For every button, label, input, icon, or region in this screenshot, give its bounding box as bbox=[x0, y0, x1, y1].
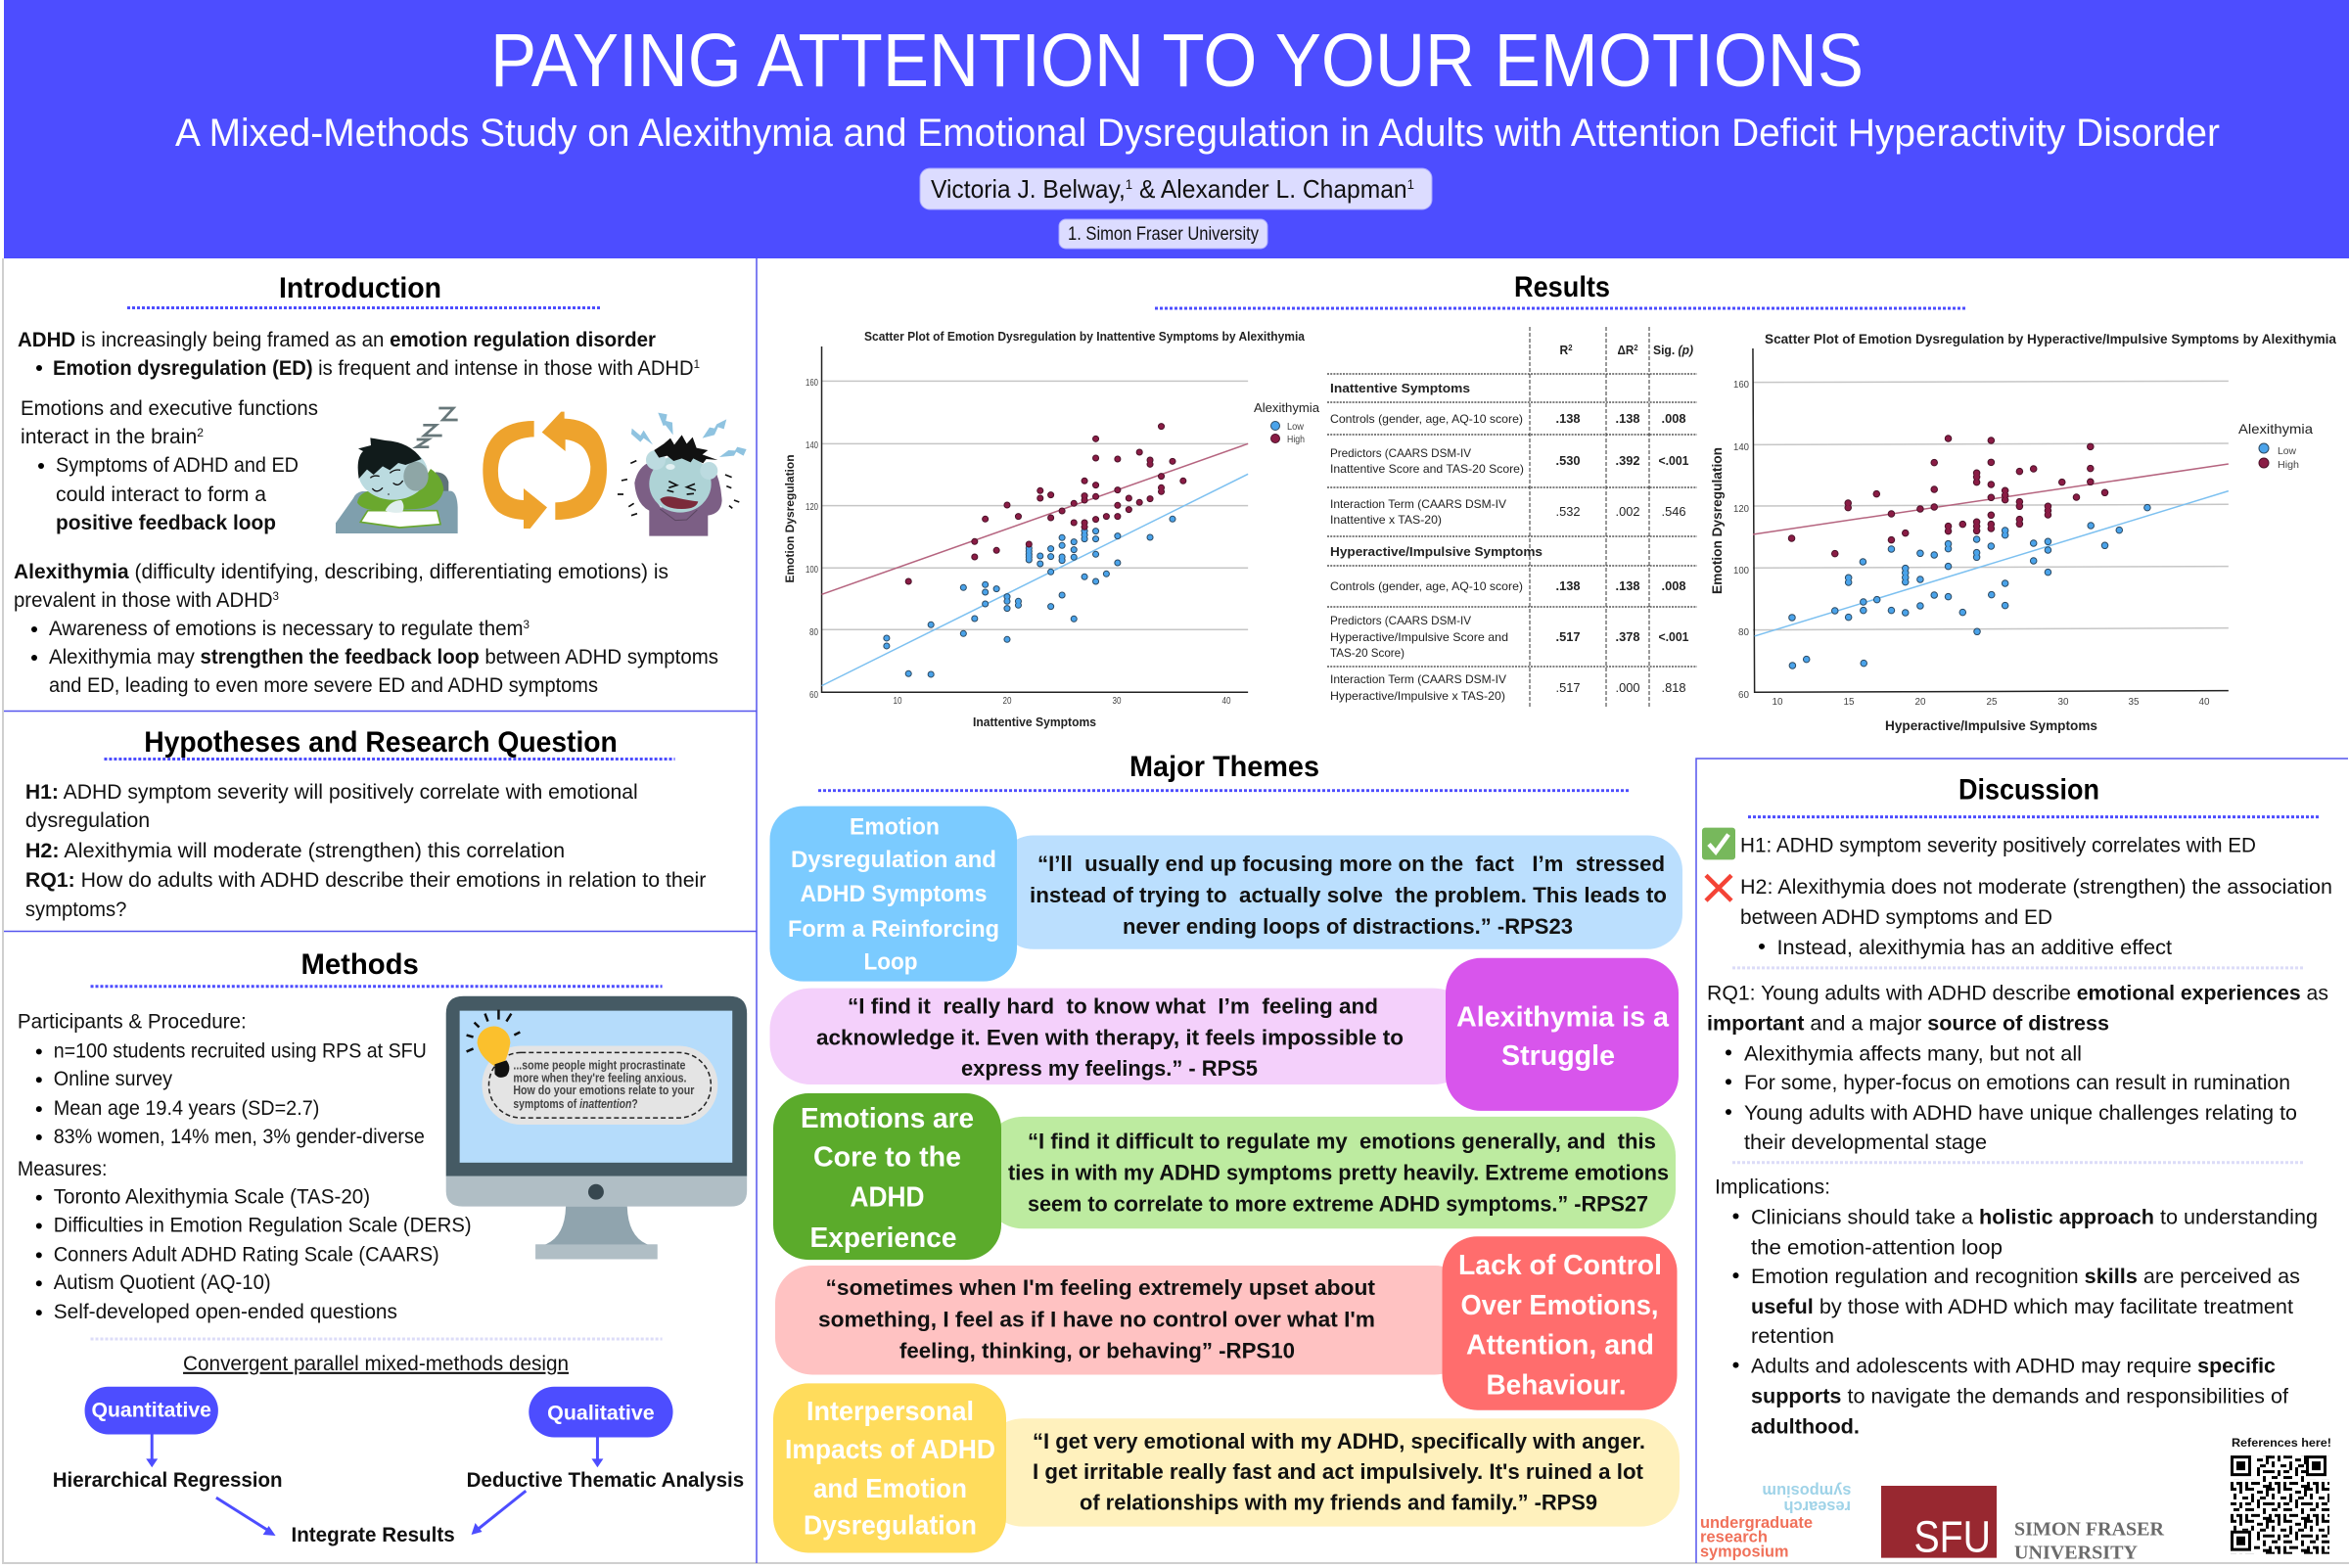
text block: participants and procedure: Mean age 19.4 years (SD=2.7) bbox=[54, 1097, 319, 1120]
regression table: Hyperactive/Impulsive Score and bbox=[1330, 630, 1508, 644]
text block: feedback loop: positive feedback loop bbox=[56, 512, 276, 534]
scatter plot: inattentive symptoms: 140 bbox=[806, 440, 818, 451]
authors pill: 1 bbox=[1407, 176, 1414, 192]
scatter plot: inattentive symptoms: 30 bbox=[1112, 696, 1122, 707]
text block: H2 result: H2: Alexithymia does not moderate (strengthen) the association bbox=[1740, 876, 2332, 899]
scatter plot: inattentive symptoms: 60 bbox=[809, 690, 818, 701]
panel: hypotheses and research question bbox=[25, 726, 706, 921]
theme 2: alexithymia is a struggle: Alexithymia is a bbox=[1456, 1001, 1670, 1033]
icon: computer monitor with survey question: more when they're feeling anxious. bbox=[513, 1071, 686, 1084]
text block: hypotheses: H2: Alexithymia will moderate (strengthen) this correlation bbox=[25, 840, 565, 862]
theme 3: emotions are core: Core to the bbox=[813, 1142, 961, 1174]
theme 4: lack of control: “sometimes when I'm feeling extremely upset about bbox=[826, 1275, 1376, 1300]
logo: undergraduate research symposium: research bbox=[1783, 1498, 1851, 1516]
text block: ADHD framing: 1 bbox=[694, 357, 700, 371]
regression table: ΔR bbox=[1617, 344, 1635, 357]
theme 3: emotions are core: Emotions are bbox=[801, 1103, 974, 1134]
theme 5: interpersonal impacts: Dysregulation bbox=[804, 1510, 977, 1541]
regression table: Predictors (CAARS DSM-IV bbox=[1330, 614, 1471, 627]
text block: alexithymia bbox=[14, 561, 718, 697]
QR code and references label bbox=[2231, 1436, 2331, 1554]
theme 5: interpersonal impacts: of relationships with my friends and family.” -RPS9 bbox=[1080, 1491, 1597, 1515]
icon: computer monitor with survey question: ...some people might procrastinate bbox=[513, 1058, 686, 1072]
logo: SFU: SIMON FRASER bbox=[2014, 1519, 2165, 1541]
regression table: .392 bbox=[1615, 454, 1640, 468]
text block: measures: Measures: bbox=[18, 1158, 107, 1180]
theme 5: interpersonal impacts: I get irritable really fast and act impulsively. It's ruined a lot bbox=[1033, 1459, 1644, 1484]
authors pill: Victoria J. Belway, bbox=[931, 174, 1136, 204]
text block: participants and procedure: n=100 students recruited using RPS at SFU bbox=[54, 1039, 427, 1062]
theme 1: reinforcing loop: Form a Reinforcing bbox=[788, 916, 999, 943]
theme 4: lack of control: Lack of Control bbox=[1458, 1250, 1662, 1281]
icon: computer monitor with survey question bbox=[446, 996, 747, 1259]
authors pill: & Alexander L. Chapman bbox=[1132, 174, 1407, 204]
pill: qualitative: Qualitative bbox=[547, 1403, 655, 1425]
scatter plot: inattentive symptoms: 160 bbox=[806, 378, 818, 389]
scatter plot: inattentive symptoms: Inattentive Symptoms bbox=[973, 715, 1096, 729]
text block: measures: Difficulties in Emotion Regulation Scale (DERS) bbox=[54, 1215, 472, 1237]
text block: measures: Autism Quotient (AQ-10) bbox=[54, 1271, 271, 1294]
arrow: qualitative to thematic analysis bbox=[591, 1437, 603, 1467]
text block: implications: Clinicians should take a holistic approach to understanding bbox=[1751, 1206, 2318, 1228]
text block: implications: Emotion regulation and recognition skills are perceived as bbox=[1751, 1266, 2300, 1288]
scatter plot: hyperactive/impulsive symptoms: 60 bbox=[1738, 690, 1749, 701]
text block: RQ1 result: important and a major source of distress bbox=[1707, 1013, 2109, 1035]
legend: alexithymia: Low bbox=[2278, 446, 2297, 457]
theme 1: reinforcing loop: instead of trying to actually solve the problem. This leads to bbox=[1030, 883, 1667, 907]
theme 3: emotions are core: ties in with my ADHD symptoms pretty heavily. Extreme emotions bbox=[1008, 1161, 1669, 1185]
text block: implications: the emotion-attention loop bbox=[1751, 1236, 2003, 1259]
regression table: Controls (gender, age, AQ-10 score) bbox=[1330, 412, 1523, 426]
pill: qualitative bbox=[529, 1387, 673, 1437]
text block: ADHD framing: ADHD is increasingly being framed as an emotion regulation disorder bbox=[18, 329, 656, 351]
logo: undergraduate research symposium: undergraduate bbox=[1700, 1513, 1813, 1532]
scatter plot: hyperactive/impulsive symptoms bbox=[1709, 332, 2336, 733]
text block: participants and procedure bbox=[18, 1011, 427, 1148]
text block: RQ1 result bbox=[1707, 983, 2328, 1154]
text block: measures: Self-developed open-ended questions bbox=[54, 1301, 397, 1323]
theme 1: reinforcing loop: Emotion bbox=[850, 814, 940, 840]
icon: cycle arrows bbox=[483, 412, 607, 529]
logo: undergraduate research symposium: symposium bbox=[1763, 1482, 1852, 1500]
text block: hypotheses bbox=[25, 781, 706, 921]
theme 4: lack of control: feeling, thinking, or behaving” -RPS10 bbox=[899, 1339, 1295, 1363]
text block: RQ1 result: Alexithymia affects many, but not all bbox=[1744, 1042, 2082, 1065]
arrow: thematic analysis to integration bbox=[472, 1491, 526, 1535]
theme 4: lack of control: Attention, and bbox=[1466, 1330, 1654, 1361]
regression table: TAS-20 Score) bbox=[1330, 646, 1405, 660]
regression table: 2 bbox=[1634, 344, 1638, 352]
scatter plot: hyperactive/impulsive symptoms: 10 bbox=[1772, 697, 1783, 708]
text block: alexithymia: prevalent in those with ADHD bbox=[14, 589, 281, 612]
theme 3: emotions are core: Experience bbox=[810, 1222, 956, 1254]
authors pill bbox=[920, 168, 1432, 209]
regression table: Hyperactive/Impulsive Symptoms bbox=[1330, 545, 1543, 559]
theme 4: lack of control: Over Emotions, bbox=[1460, 1290, 1658, 1321]
regression table: <.001 bbox=[1658, 454, 1689, 468]
panel: discussion bbox=[1700, 774, 2332, 1564]
panel: methods bbox=[18, 948, 747, 1546]
legend: alexithymia bbox=[1254, 401, 1319, 445]
panel: major themes bbox=[769, 751, 1682, 1552]
scatter plot: hyperactive/impulsive symptoms: 30 bbox=[2057, 697, 2069, 708]
scatter plot: inattentive symptoms bbox=[783, 330, 1319, 729]
text block: RQ1 result: For some, hyper-focus on emotions can result in rumination bbox=[1744, 1072, 2290, 1094]
regression table: .000 bbox=[1615, 681, 1640, 695]
panel: introduction bbox=[14, 272, 747, 697]
legend: alexithymia bbox=[2238, 421, 2313, 471]
regression table: .138 bbox=[1556, 412, 1581, 426]
text block: implications: Implications: bbox=[1715, 1176, 1830, 1199]
theme 3: emotions are core: seem to correlate to more extreme ADHD symptoms.” -RPS27 bbox=[1028, 1191, 1648, 1216]
text block: H2 result bbox=[1740, 876, 2332, 959]
theme 4: lack of control: something, I feel as if I have no control over what I'm bbox=[818, 1308, 1375, 1332]
title: PAYING ATTENTION TO YOUR EMOTIONS bbox=[490, 19, 1864, 103]
text block: hypotheses: RQ1: How do adults with ADHD describe their emotions in relation to their bbox=[25, 869, 706, 892]
text block: implications: adulthood. bbox=[1751, 1415, 1860, 1438]
regression table: Inattentive x TAS-20) bbox=[1330, 513, 1442, 527]
text block: hypotheses: symptoms? bbox=[25, 899, 126, 921]
regression table: .378 bbox=[1615, 630, 1640, 644]
theme 2: alexithymia is a struggle: “I find it really hard to know what I’m feeling and bbox=[848, 994, 1378, 1018]
regression table: .008 bbox=[1662, 412, 1686, 426]
icon: stressed person bbox=[618, 413, 747, 536]
logo: SFU: UNIVERSITY bbox=[2014, 1543, 2139, 1564]
text block: feedback loop bbox=[21, 397, 318, 534]
icon: computer monitor with survey question: How do your emotions relate to your bbox=[513, 1084, 695, 1097]
arrow: quantitative to regression bbox=[146, 1434, 158, 1467]
logo: undergraduate research symposium bbox=[1700, 1482, 1852, 1561]
text block: feedback loop: interact in the brain bbox=[21, 426, 196, 448]
scatter plot: hyperactive/impulsive symptoms: 100 bbox=[1733, 566, 1749, 576]
theme 1: reinforcing loop: “I’ll usually end up focusing more on the fact I’m stressed bbox=[1037, 852, 1665, 876]
legend: alexithymia: Alexithymia bbox=[1254, 401, 1319, 415]
text block: implications: retention bbox=[1751, 1325, 1834, 1348]
regression table: .530 bbox=[1556, 454, 1581, 468]
text block: implications bbox=[1715, 1176, 2318, 1438]
flow diagram: mixed-methods design: Convergent parallel mixed-methods design bbox=[183, 1353, 569, 1375]
text block: feedback loop: Emotions and executive functions bbox=[21, 397, 318, 420]
theme 2: alexithymia is a struggle: Struggle bbox=[1501, 1040, 1615, 1072]
QR code and references label: References here! bbox=[2232, 1436, 2331, 1450]
flow diagram: mixed-methods design: Deductive Thematic Analysis bbox=[467, 1469, 744, 1492]
heading: major themes: Major Themes bbox=[1129, 751, 1319, 783]
icon: computer monitor with survey question: symptoms of inattention? bbox=[513, 1097, 638, 1111]
scatter plot: inattentive symptoms: 80 bbox=[809, 627, 818, 638]
legend: alexithymia: Alexithymia bbox=[2238, 421, 2313, 437]
regression table: .818 bbox=[1662, 681, 1686, 695]
theme 5: interpersonal impacts: Impacts of ADHD bbox=[785, 1434, 995, 1464]
text block: alexithymia: and ED, leading to even more severe ED and ADHD symptoms bbox=[49, 674, 598, 697]
text block: participants and procedure: Online survey bbox=[54, 1068, 173, 1090]
heading: methods: Methods bbox=[300, 948, 419, 981]
regression table: .138 bbox=[1615, 412, 1640, 426]
scatter plot: inattentive symptoms: 10 bbox=[893, 696, 902, 707]
text block: measures: Conners Adult ADHD Rating Scale (CAARS) bbox=[54, 1243, 439, 1266]
theme 5: interpersonal impacts bbox=[773, 1383, 1680, 1552]
text block: measures bbox=[18, 1158, 472, 1323]
text block: participants and procedure: 83% women, 14% men, 3% gender-diverse bbox=[54, 1126, 425, 1148]
regression table: <.001 bbox=[1658, 630, 1689, 644]
regression table: .546 bbox=[1662, 505, 1686, 519]
text block: RQ1 result: their developmental stage bbox=[1744, 1131, 1987, 1154]
theme 5: interpersonal impacts: and Emotion bbox=[813, 1473, 967, 1503]
regression table: Inattentive Score and TAS-20 Score) bbox=[1330, 462, 1524, 476]
logo: SFU: SFU bbox=[1914, 1511, 1991, 1562]
theme 2: alexithymia is a struggle: acknowledge it. Even with therapy, it feels impossible to bbox=[816, 1025, 1404, 1049]
subtitle: A Mixed-Methods Study on Alexithymia and Emotional Dysregulation in Adults with Attention Deficit Hyperactivity Disorder bbox=[175, 112, 2220, 155]
theme 2: alexithymia is a struggle bbox=[769, 958, 1679, 1111]
theme 1: reinforcing loop: ADHD Symptoms bbox=[801, 881, 988, 907]
theme 5: interpersonal impacts: “I get very emotional with my ADHD, specifically with anger. bbox=[1033, 1429, 1645, 1453]
theme 2: alexithymia is a struggle: express my feelings.” - RPS5 bbox=[961, 1056, 1258, 1081]
regression table: .138 bbox=[1556, 579, 1581, 593]
regression table: R bbox=[1560, 344, 1569, 357]
scatter plot: hyperactive/impulsive symptoms: 80 bbox=[1738, 627, 1749, 638]
text block: measures: Toronto Alexithymia Scale (TAS-20) bbox=[54, 1186, 370, 1209]
regression table: Sig. (p) bbox=[1653, 344, 1693, 357]
theme 4: lack of control: Behaviour. bbox=[1486, 1369, 1626, 1401]
text block: alexithymia: 3 bbox=[523, 618, 530, 631]
pill: quantitative bbox=[85, 1387, 218, 1434]
scatter plot: inattentive symptoms: 100 bbox=[806, 565, 818, 576]
scatter plot: hyperactive/impulsive symptoms: 40 bbox=[2198, 697, 2210, 708]
text block: alexithymia: Alexithymia (difficulty identifying, describing, differentiating emotions) is bbox=[14, 561, 668, 583]
affiliation pill: 1. Simon Fraser University bbox=[1068, 224, 1259, 245]
heading: results: Results bbox=[1514, 271, 1610, 303]
scatter plot: hyperactive/impulsive symptoms: 35 bbox=[2128, 697, 2140, 708]
logo: SFU bbox=[1881, 1486, 2165, 1564]
text block: alexithymia: 3 bbox=[273, 589, 279, 603]
text block: feedback loop: Symptoms of ADHD and ED bbox=[56, 454, 299, 477]
icon: light bulb bbox=[467, 1010, 520, 1078]
scatter plot: hyperactive/impulsive symptoms: 20 bbox=[1914, 697, 1926, 708]
scatter plot: inattentive symptoms: Scatter Plot of Emotion Dysregulation by Inattentive Symptoms by Alexithymia bbox=[864, 330, 1306, 344]
theme 1: reinforcing loop: Dysregulation and bbox=[791, 847, 996, 873]
scatter plot: inattentive symptoms: Emotion Dysregulation bbox=[783, 454, 797, 583]
regression table: Controls (gender, age, AQ-10 score) bbox=[1330, 579, 1523, 593]
regression table: .517 bbox=[1556, 630, 1581, 644]
text block: ADHD framing: Emotion dysregulation (ED) is frequent and intense in those with ADHD bbox=[53, 357, 710, 380]
scatter plot: inattentive symptoms: 120 bbox=[806, 502, 818, 513]
theme 1: reinforcing loop bbox=[769, 807, 1682, 982]
pill: quantitative: Quantitative bbox=[92, 1400, 211, 1422]
regression table: .517 bbox=[1556, 681, 1581, 695]
icon: green check bbox=[1702, 828, 1735, 859]
regression table: Inattentive Symptoms bbox=[1330, 382, 1470, 395]
logo: undergraduate research symposium: symposium bbox=[1700, 1543, 1789, 1561]
scatter plot: hyperactive/impulsive symptoms: 15 bbox=[1844, 697, 1855, 708]
text block: hypotheses: dysregulation bbox=[25, 809, 150, 832]
heading: discussion: Discussion bbox=[1958, 774, 2099, 807]
legend: alexithymia: Low bbox=[1287, 422, 1305, 433]
scatter plot: hyperactive/impulsive symptoms: Emotion Dysregulation bbox=[1709, 447, 1725, 594]
regression table: Interaction Term (CAARS DSM-IV bbox=[1330, 672, 1506, 686]
panel: results bbox=[783, 271, 2336, 733]
theme 3: emotions are core bbox=[773, 1093, 1676, 1260]
text block: H1 result: H1: ADHD symptom severity positively correlates with ED bbox=[1740, 835, 2256, 856]
heading: introduction: Introduction bbox=[279, 272, 441, 304]
text block: feedback loop: could interact to form a bbox=[56, 484, 266, 506]
theme 3: emotions are core: ADHD bbox=[850, 1181, 925, 1213]
regression table: Interaction Term (CAARS DSM-IV bbox=[1330, 497, 1506, 511]
regression table: Hyperactive/Impulsive x TAS-20) bbox=[1330, 689, 1505, 703]
flow diagram: mixed-methods design bbox=[53, 1353, 744, 1546]
flow diagram: mixed-methods design: Integrate Results bbox=[292, 1524, 455, 1546]
regression table: .138 bbox=[1615, 579, 1640, 593]
text block: implications: supports to navigate the demands and responsibilities of bbox=[1751, 1386, 2288, 1407]
scatter plot: hyperactive/impulsive symptoms: Scatter Plot of Emotion Dysregulation by Hyperactive/Impulsive Symptoms by Alexithymia bbox=[1765, 332, 2336, 346]
text block: implications: useful by those with ADHD which may facilitate treatment bbox=[1751, 1296, 2293, 1318]
scatter plot: hyperactive/impulsive symptoms: 120 bbox=[1733, 504, 1749, 515]
theme 1: reinforcing loop: Loop bbox=[864, 949, 918, 976]
flow diagram: mixed-methods design: Hierarchical Regression bbox=[53, 1469, 283, 1492]
arrow: regression to integration bbox=[216, 1498, 276, 1536]
text block: participants and procedure: Participants & Procedure: bbox=[18, 1011, 247, 1034]
theme 5: interpersonal impacts: Interpersonal bbox=[806, 1396, 974, 1426]
text block: alexithymia: Alexithymia may strengthen the feedback loop between ADHD symptoms bbox=[49, 646, 718, 669]
text block: H2 result: Instead, alexithymia has an additive effect bbox=[1777, 937, 2172, 959]
scatter plot: hyperactive/impulsive symptoms: 25 bbox=[1987, 697, 1998, 708]
theme 3: emotions are core: “I find it difficult to regulate my emotions generally, and this bbox=[1028, 1130, 1656, 1154]
regression table bbox=[1327, 327, 1697, 709]
legend: alexithymia: High bbox=[1287, 435, 1305, 445]
legend: alexithymia: High bbox=[2278, 460, 2299, 471]
text block: hypotheses: H1: ADHD symptom severity will positively correlate with emotional bbox=[25, 781, 638, 804]
regression table: .002 bbox=[1615, 505, 1640, 519]
regression table: 2 bbox=[1568, 344, 1573, 352]
icon: red cross bbox=[1706, 875, 1731, 900]
text block: RQ1 result: RQ1: Young adults with ADHD describe emotional experiences as bbox=[1707, 983, 2328, 1005]
regression table: .532 bbox=[1556, 505, 1581, 519]
regression table: Predictors (CAARS DSM-IV bbox=[1330, 446, 1471, 460]
text block: alexithymia: Awareness of emotions is necessary to regulate them bbox=[49, 618, 536, 640]
icon: sleeping student bbox=[336, 408, 458, 533]
scatter plot: hyperactive/impulsive symptoms: Hyperactive/Impulsive Symptoms bbox=[1885, 717, 2097, 733]
scatter plot: hyperactive/impulsive symptoms: 140 bbox=[1733, 442, 1749, 453]
theme 1: reinforcing loop: never ending loops of distractions.” -RPS23 bbox=[1123, 914, 1573, 939]
scatter plot: inattentive symptoms: 40 bbox=[1221, 696, 1231, 707]
text block: implications: Adults and adolescents with ADHD may require specific bbox=[1751, 1356, 2276, 1378]
heading: hypotheses: Hypotheses and Research Question bbox=[144, 726, 618, 759]
header banner bbox=[4, 0, 2349, 258]
affiliation pill bbox=[1059, 219, 1267, 249]
text block: H2 result: between ADHD symptoms and ED bbox=[1740, 906, 2052, 929]
text block: RQ1 result: Young adults with ADHD have unique challenges relating to bbox=[1744, 1102, 2297, 1125]
text block: feedback loop: 2 bbox=[197, 426, 204, 439]
theme 4: lack of control bbox=[775, 1236, 1678, 1410]
regression table: .008 bbox=[1662, 579, 1686, 593]
scatter plot: hyperactive/impulsive symptoms: 160 bbox=[1733, 380, 1749, 391]
logo: undergraduate research symposium: research bbox=[1700, 1528, 1768, 1546]
authors pill: 1 bbox=[1126, 176, 1132, 192]
text block: ADHD framing bbox=[18, 329, 700, 380]
scatter plot: inattentive symptoms: 20 bbox=[1002, 696, 1012, 707]
